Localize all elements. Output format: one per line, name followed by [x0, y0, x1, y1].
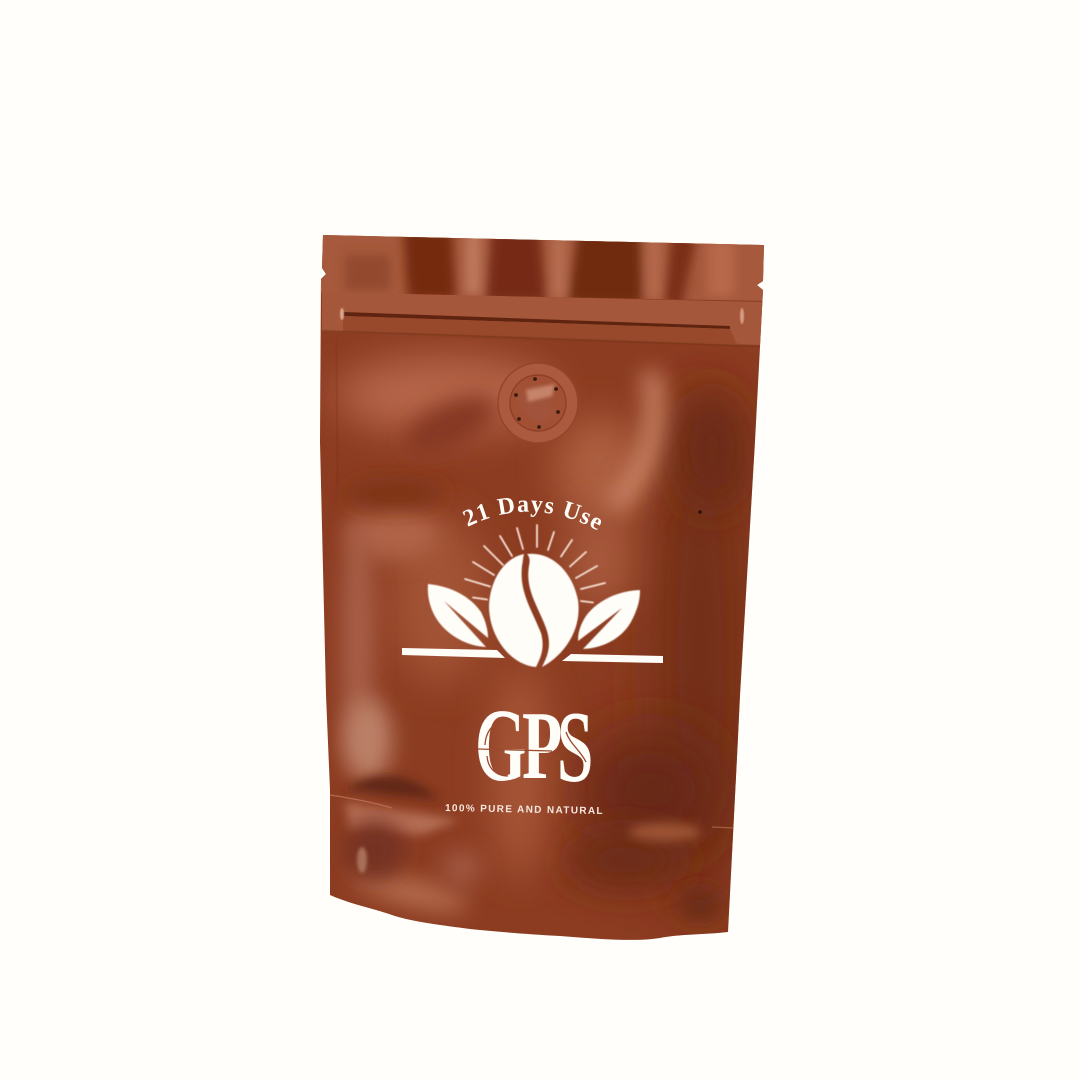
zipper band — [322, 292, 764, 346]
logo: coffee bean — [489, 554, 579, 667]
brand name — [475, 687, 593, 804]
logo: sun rays — [465, 525, 605, 602]
logo: curved heading — [462, 498, 601, 530]
brand name: S — [557, 692, 593, 804]
logo: curved heading: 21 Days Use — [462, 498, 601, 530]
product image: coffee pouch on cream background — [320, 235, 764, 940]
lighting: broad shading on the foil — [335, 355, 747, 921]
logo: left leaf — [428, 584, 488, 647]
logo: ground line — [402, 648, 663, 663]
pouch body — [320, 235, 764, 940]
brand name: P — [522, 692, 562, 800]
tagline: 100% PURE AND NATURAL — [445, 803, 604, 817]
degassing valve — [498, 363, 578, 443]
brand name: G — [475, 687, 526, 803]
side seams — [330, 340, 734, 873]
logo: right leaf — [578, 590, 640, 649]
top flap with vertical folds — [320, 235, 764, 301]
brand name inline detail — [478, 719, 586, 776]
